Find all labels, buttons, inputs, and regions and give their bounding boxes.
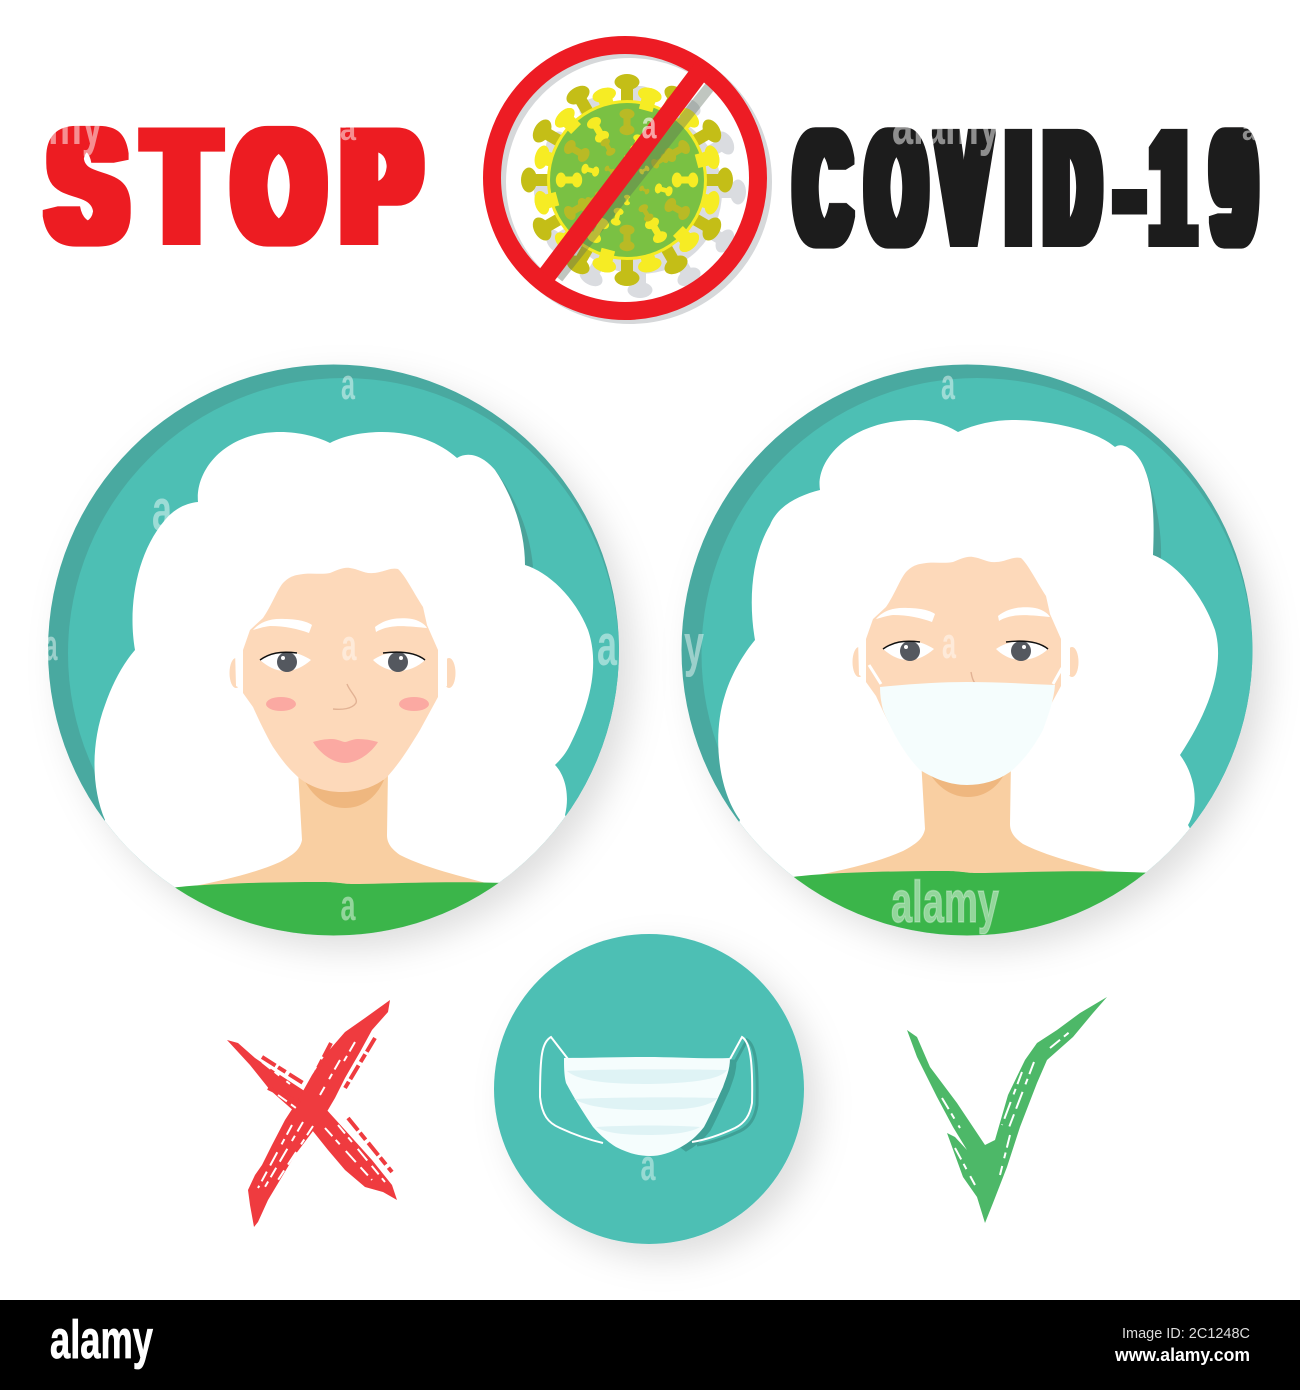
- watermarks: a: [597, 613, 617, 678]
- watermarks: a: [942, 619, 956, 668]
- red ring and slash: [492, 45, 758, 311]
- image id: Image ID: 2C1248C: [1122, 1325, 1250, 1342]
- watermarks: a: [44, 621, 58, 670]
- watermarks: a: [342, 621, 357, 670]
- footer bar: [0, 1300, 1300, 1390]
- cheeks: [266, 697, 429, 711]
- watermark: a: [941, 360, 955, 409]
- figure: [793, 557, 1153, 939]
- panel: woman without mask: [40, 360, 640, 950]
- hair shadow: [496, 472, 533, 568]
- watermarks: [44, 613, 617, 930]
- title: COVID-19: a: [1242, 114, 1257, 147]
- hair: [718, 420, 1218, 936]
- watermarks: [684, 613, 999, 935]
- nose: [971, 672, 975, 683]
- virus: [511, 64, 743, 296]
- figure: [175, 568, 499, 936]
- mask straps: [540, 1037, 752, 1143]
- mask pleats: [567, 1069, 727, 1135]
- watermarks: y: [684, 613, 704, 678]
- panel: woman with mask: [680, 360, 1260, 950]
- lips: [313, 739, 378, 763]
- surgical mask: [564, 1057, 730, 1156]
- title: COVID-19: alamy: [892, 92, 1000, 157]
- eyes and brows: [876, 607, 1050, 661]
- nose: [333, 684, 356, 709]
- panel: woman with mask: a: [1136, 483, 1156, 548]
- icon: mask circle: [494, 934, 804, 1244]
- title: STOP: a: [340, 111, 356, 147]
- mask shadow: [569, 1040, 757, 1150]
- icon: green check mark: [907, 997, 1107, 1223]
- slash shadow: [558, 84, 712, 278]
- title: COVID-19: COVID-19: [797, 96, 1254, 279]
- title: STOP: STOP: [51, 97, 418, 277]
- footer logo: alamy: [50, 1310, 153, 1370]
- virus shadow: [534, 86, 746, 298]
- icon: prohibited virus sign: [492, 45, 763, 315]
- eyes and brows: [253, 618, 427, 672]
- face mask: [880, 682, 1055, 785]
- panel: woman without mask: a: [152, 478, 172, 543]
- watermarks: a: [340, 881, 356, 930]
- hair: [94, 432, 594, 936]
- watermarks: alamy: [891, 870, 999, 935]
- mask straps: [869, 665, 1062, 684]
- website: www.alamy.com: [1114, 1345, 1250, 1365]
- watermark: a: [341, 360, 355, 409]
- hair shadow: [1146, 474, 1161, 558]
- icon: red cross: [227, 1000, 397, 1227]
- icon: prohibited virus sign: a: [642, 105, 657, 147]
- watermark: a: [640, 1141, 656, 1190]
